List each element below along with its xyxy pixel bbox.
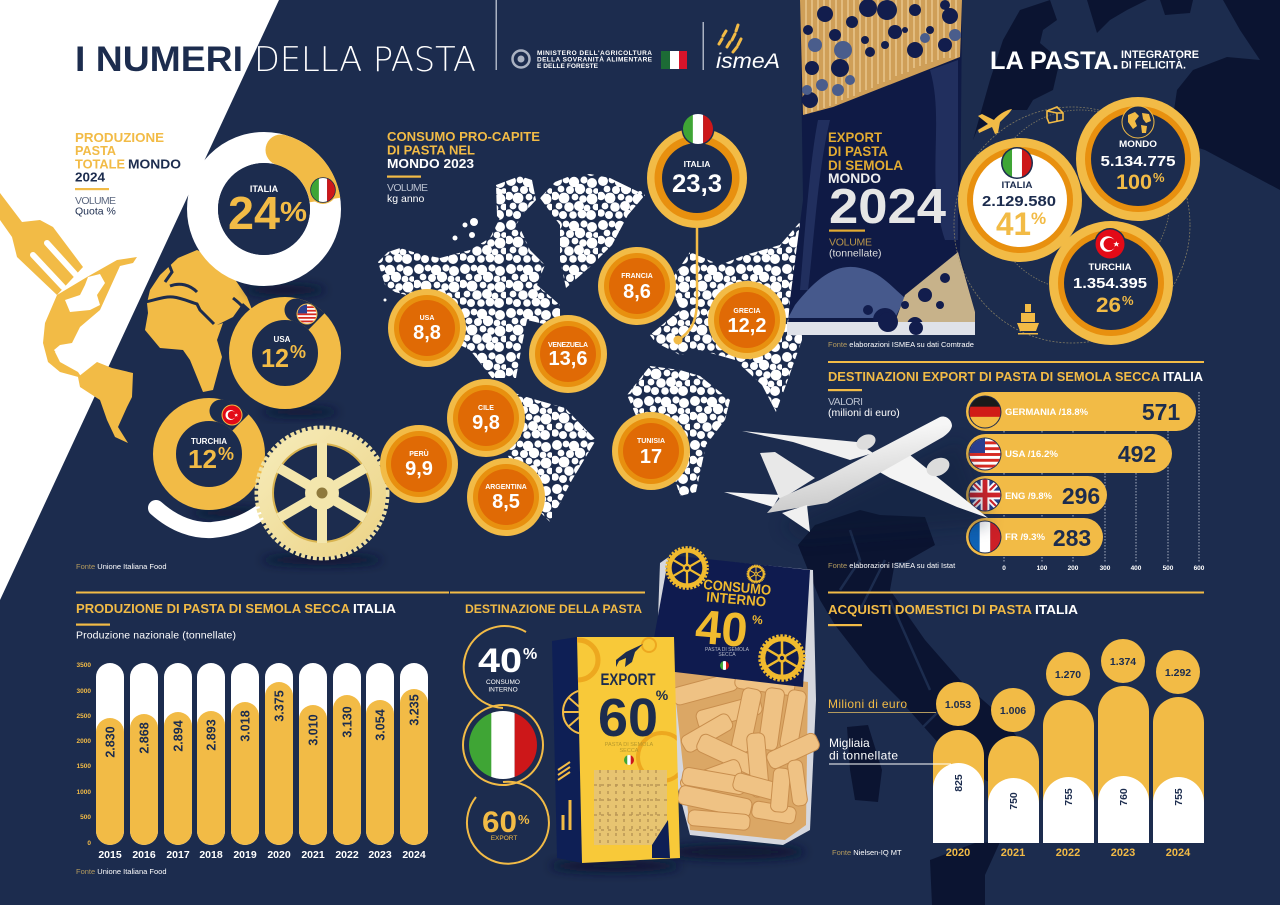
logo: ministero: E DELLE FORESTE (537, 63, 599, 70)
donut rings: 60% export: 60 (482, 806, 517, 839)
label: milioni di euro: Milioni di euro (828, 697, 907, 711)
heading: produzione semola secca italia: ITALIA (353, 601, 397, 616)
export bar chart: ENG /9.8% (1005, 491, 1053, 502)
flag: France (970, 522, 1001, 552)
donut rings: 40% consumo: 40 (478, 642, 522, 680)
production bar chart: 2016 (132, 849, 156, 861)
logo: ministero (496, 0, 687, 70)
heading: export di pasta di semola: 2024 (829, 180, 946, 234)
pasta box: export: % (656, 687, 669, 703)
tagline: INTEGRATORE (1121, 49, 1199, 61)
source: Unione Italiana Food (bottom): Fonte Unione Italiana Food (76, 867, 166, 876)
production bar chart: 1000 (77, 789, 91, 796)
acquisti bar chart (933, 639, 1204, 859)
production bar chart: 2024 (402, 849, 426, 861)
heading: destinazioni export (828, 361, 1204, 419)
heading: consumo pro-capite: CONSUMO PRO-CAPITE (387, 129, 540, 144)
source: istat: Fonte elaborazioni ISMEA su dati Istat (828, 561, 956, 570)
production bar chart: 2500 (77, 713, 91, 720)
export bar chart: GERMANIA /18.8% (1005, 407, 1089, 418)
heading: consumo pro-capite (387, 129, 540, 205)
bubble: Francia: 8,6 (623, 281, 651, 303)
production bar chart (77, 662, 428, 861)
tagline: DI FELICITÀ. (1121, 58, 1186, 72)
acquisti bar chart: 760 (1118, 788, 1130, 806)
acquisti bar chart: 1.292 (1165, 667, 1191, 679)
icon: plane (978, 109, 1012, 134)
donut rings: 40% consumo (464, 626, 537, 708)
circle: Mondo: % (1153, 170, 1165, 185)
donut rings: 60% export: EXPORT (491, 835, 517, 842)
heading: consumo pro-capite: MONDO 2023 (387, 156, 474, 171)
production bar chart: 2022 (335, 849, 359, 861)
bubble: Francia (598, 247, 676, 325)
label: migliaia di tonnellate: di tonnellate (829, 748, 898, 762)
flag: USA (970, 438, 1000, 470)
pasta wheel (256, 428, 388, 565)
background map: dark world top right (973, 0, 1280, 190)
bubble: USA (388, 289, 466, 367)
logo: ismea: ismeA (716, 50, 780, 73)
heading: export di pasta di semola: VOLUME (829, 236, 872, 248)
heading: destinazione della pasta: DESTINAZIONE DELLA PASTA (465, 604, 642, 616)
heading: export di pasta di semola: DI SEMOLA (828, 158, 903, 173)
icon: parcel (1047, 107, 1063, 123)
icon: ship (1017, 304, 1039, 334)
production bar chart: 2019 (233, 849, 257, 861)
heading: acquisti domestici: ITALIA (1035, 602, 1079, 617)
title (75, 40, 476, 80)
bubble: Venezuela: 13,6 (549, 348, 587, 370)
circle: Mondo: MONDO (1119, 139, 1157, 150)
white diagonal panel (0, 0, 279, 600)
pasta box: export: 60 (598, 688, 658, 748)
source: Unione Italiana Food (top): Fonte Unione Italiana Food (76, 562, 166, 571)
heading: acquisti domestici: ACQUISTI DOMESTICI DI PASTA (828, 602, 1033, 617)
bubble: Argentina: ARGENTINA (485, 484, 527, 491)
bubble: Tunisia: TUNISIA (637, 438, 665, 445)
bubble: Argentina: 8,5 (492, 491, 520, 513)
background map: Italy silhouette (798, 510, 1035, 905)
donut rings: 40% consumo: CONSUMO (486, 679, 520, 686)
export bar chart: 600 (1194, 565, 1205, 572)
label: migliaia di tonnellate: Migliaia (829, 736, 870, 750)
production bar chart: 1500 (77, 763, 91, 770)
bubble: Grecia: 12,2 (728, 315, 766, 337)
production bar chart: 2017 (166, 849, 190, 861)
bubble: Grecia (708, 281, 786, 359)
export bar chart: 296 (1062, 483, 1100, 509)
bubble: Cile: CILE (478, 405, 494, 412)
bubble: Tunisia (612, 412, 690, 490)
pasta box: export: PASTA DI SEMOLA (605, 742, 654, 748)
production bar chart: 2.830 (104, 726, 118, 758)
production bar chart: 3.130 (340, 706, 354, 738)
acquisti bar chart: 2021 (1001, 847, 1025, 859)
flag: Germany (970, 396, 1000, 428)
donut: Italia 24% (202, 134, 337, 295)
pasta box: export (550, 637, 686, 872)
heading: consumo pro-capite: DI PASTA NEL (387, 142, 475, 158)
export bar chart: 300 (1100, 565, 1111, 572)
heading: export di pasta di semola: DI PASTA (828, 144, 888, 159)
export bar chart: FR /9.3% (1005, 532, 1046, 543)
source: comtrade: Fonte elaborazioni ISMEA su dati Comtrade (828, 340, 974, 349)
bubble: Venezuela: VENEZUELA (548, 342, 588, 349)
acquisti bar chart: 1.053 (945, 699, 971, 711)
acquisti bar chart: 755 (1173, 788, 1185, 806)
donut: Turchia 12%: % (218, 444, 234, 464)
bubble: Cile: 9,8 (472, 412, 500, 434)
export bar chart: 492 (1118, 441, 1156, 467)
bubble: USA: 8,8 (413, 322, 441, 344)
donut: Italia 24%: ITALIA (250, 184, 279, 194)
pasta bag: consumo interno: INTERNO (706, 588, 767, 610)
dotted world map (370, 170, 810, 530)
title: I NUMERI (75, 40, 243, 79)
flag: UK (970, 480, 1000, 510)
label: migliaia di tonnellate (829, 736, 951, 764)
donut rings: 60% export: % (518, 812, 530, 827)
pasta box: export: SECCA (620, 748, 639, 754)
export pasta bag (787, 0, 975, 335)
heading: produzione pasta totale mondo: MONDO (128, 156, 181, 172)
bubble: Tunisia: 17 (640, 446, 662, 468)
production bar chart: 2000 (77, 738, 91, 745)
heading: export di pasta di semola: (tonnellate) (829, 248, 882, 260)
acquisti bar chart: 2020 (946, 847, 970, 859)
pasta bag: consumo interno: PASTA DI SEMOLA (705, 647, 750, 653)
donut rings: 60% export (467, 782, 549, 864)
production bar chart: 3.375 (272, 690, 286, 722)
white swoosh (156, 508, 264, 530)
donut: USA 12%: 12 (261, 343, 289, 373)
heading: produzione semola secca italia (76, 592, 449, 642)
export bar chart: 200 (1068, 565, 1079, 572)
bubble: USA: USA (420, 315, 434, 322)
heading: acquisti domestici (828, 592, 1204, 626)
bubble: Italia 23,3 (647, 112, 747, 344)
bubble: Italia 23,3: ITALIA (684, 159, 710, 169)
production bar chart: 3.054 (374, 709, 388, 741)
production bar chart: 2.894 (172, 720, 186, 752)
acquisti bar chart: 1.006 (1000, 705, 1026, 717)
export bar chart (966, 392, 1205, 572)
acquisti bar chart: 2024 (1166, 847, 1191, 859)
production bar chart: 500 (80, 814, 91, 821)
heading: produzione pasta totale mondo: Quota % (75, 206, 116, 218)
export bar chart: USA /16.2% (1005, 449, 1059, 460)
tagline (990, 47, 1199, 75)
bubble: Grecia: GRECIA (733, 308, 761, 315)
acquisti bar chart: 1.374 (1110, 656, 1136, 668)
circle: Turchia: % (1122, 293, 1134, 308)
export bar chart: 283 (1053, 525, 1091, 551)
heading: destinazioni export: DESTINAZIONI EXPORT DI PASTA DI SEMOLA SECCA (828, 369, 1161, 384)
acquisti bar chart: 755 (1063, 788, 1075, 806)
title: DELLA PASTA (254, 40, 476, 80)
acquisti bar chart: 2022 (1056, 847, 1080, 859)
bubble: Perù (380, 425, 458, 503)
circle: Italia: 41 (996, 206, 1031, 242)
heading: produzione semola secca italia: PRODUZIONE DI PASTA DI SEMOLA SECCA (76, 601, 351, 616)
acquisti bar chart: 750 (1008, 792, 1020, 810)
production bar chart: 3.235 (408, 694, 422, 726)
donut rings: 40% consumo: % (523, 646, 537, 663)
heading: export di pasta di semola (828, 130, 946, 260)
heading: destinazioni export: VALORI (828, 396, 863, 408)
heading: produzione pasta totale mondo: PRODUZIONE (75, 130, 164, 145)
donut: USA 12%: % (290, 342, 306, 362)
label: milioni di euro (828, 697, 936, 713)
bubble: Cile (447, 379, 525, 457)
source: nielsen: Fonte Nielsen-IQ MT (832, 848, 902, 857)
production bar chart: 2023 (368, 849, 392, 861)
acquisti bar chart: 825 (953, 774, 965, 792)
circle: Italia: ITALIA (1002, 180, 1033, 190)
circle: Turchia: 26 (1096, 294, 1121, 317)
donut: Turchia 12% (164, 400, 268, 517)
circle: Mondo: 5.134.775 (1100, 153, 1176, 170)
circle: Mondo (1076, 97, 1200, 221)
heading: produzione pasta totale mondo: VOLUME (75, 195, 116, 207)
donut: USA 12%: USA (274, 335, 291, 344)
production bar chart: 2.893 (204, 719, 218, 751)
bubble: Perù: PERÙ (409, 449, 429, 458)
donut: Turchia 12%: 12 (188, 444, 217, 474)
export bar chart: 400 (1131, 565, 1142, 572)
donut rings: Italian flag (463, 705, 543, 785)
export bar chart: 0 (1002, 565, 1006, 572)
circle: Italia: % (1031, 209, 1046, 228)
production bar chart: 2020 (267, 849, 291, 861)
airplane (724, 417, 990, 540)
production bar chart: 2018 (199, 849, 223, 861)
bubble: Francia: FRANCIA (621, 273, 653, 280)
heading: destinazioni export: (milioni di euro) (828, 407, 900, 419)
production bar chart: 0 (87, 840, 91, 847)
bubble: Argentina (467, 458, 545, 536)
export bar chart: 500 (1163, 565, 1174, 572)
pasta bag: consumo interno: % (752, 612, 764, 627)
pasta bag: consumo interno: CONSUMO (703, 576, 772, 598)
circle: Turchia: TURCHIA (1088, 262, 1132, 273)
heading: export di pasta di semola: MONDO (828, 171, 881, 186)
donut: Italia 24%: 24 (228, 187, 280, 239)
heading: produzione pasta totale mondo (75, 130, 181, 218)
heading: consumo pro-capite: VOLUME (387, 182, 428, 194)
bubble: Perù: 9,9 (405, 458, 433, 480)
logo: ministero: DELLA SOVRANITÀ ALIMENTARE (537, 54, 653, 64)
orbits (954, 107, 1190, 343)
production bar chart: 3500 (77, 662, 91, 669)
production bar chart: 2.868 (138, 722, 152, 754)
pasta bag: consumo interno (650, 547, 821, 859)
circle: Italia (958, 138, 1082, 262)
production bar chart: 2021 (301, 849, 325, 861)
icon: fork with yellow map (0, 193, 253, 443)
heading: consumo pro-capite: kg anno (387, 193, 425, 205)
heading: destinazioni export: ITALIA (1163, 369, 1204, 384)
donut: Italia 24%: % (280, 196, 307, 227)
production bar chart: 3.018 (238, 710, 252, 742)
donut rings: 40% consumo: INTERNO (488, 686, 518, 694)
acquisti bar chart: 1.270 (1055, 669, 1081, 681)
heading: export di pasta di semola: EXPORT (828, 130, 883, 145)
bubble: Venezuela (529, 315, 607, 393)
heading: produzione pasta totale mondo: TOTALE (75, 156, 125, 172)
pasta bag: consumo interno: SECCA (718, 652, 736, 658)
logo: ismea (702, 22, 780, 73)
export bar chart: 571 (1142, 399, 1180, 425)
acquisti bar chart: 2023 (1111, 847, 1135, 859)
tagline: LA PASTA. (990, 47, 1119, 75)
heading: produzione pasta totale mondo: 2024 (75, 170, 106, 184)
circle: Turchia: 1.354.395 (1073, 275, 1147, 292)
production bar chart: 3.010 (306, 714, 320, 746)
circle: Mondo: 100 (1116, 171, 1152, 194)
pasta box: export: EXPORT (600, 671, 656, 689)
circle: Turchia (1049, 221, 1173, 345)
production bar chart: 2015 (98, 849, 122, 861)
logo: ministero: MINISTERO DELL'AGRICOLTURA (537, 50, 652, 57)
donut: USA 12% (240, 298, 338, 416)
circle: Italia: 2.129.580 (982, 193, 1056, 210)
heading: produzione pasta totale mondo: PASTA (75, 143, 117, 158)
donut: Turchia 12%: TURCHIA (191, 437, 227, 446)
bubble: Italia 23,3: 23,3 (672, 170, 722, 198)
production bar chart: 3000 (77, 688, 91, 695)
export bar chart: 100 (1037, 565, 1048, 572)
pasta bag: consumo interno: 40 (693, 601, 750, 658)
heading: produzione semola secca italia: Produzione nazionale (tonnellate) (76, 630, 236, 642)
